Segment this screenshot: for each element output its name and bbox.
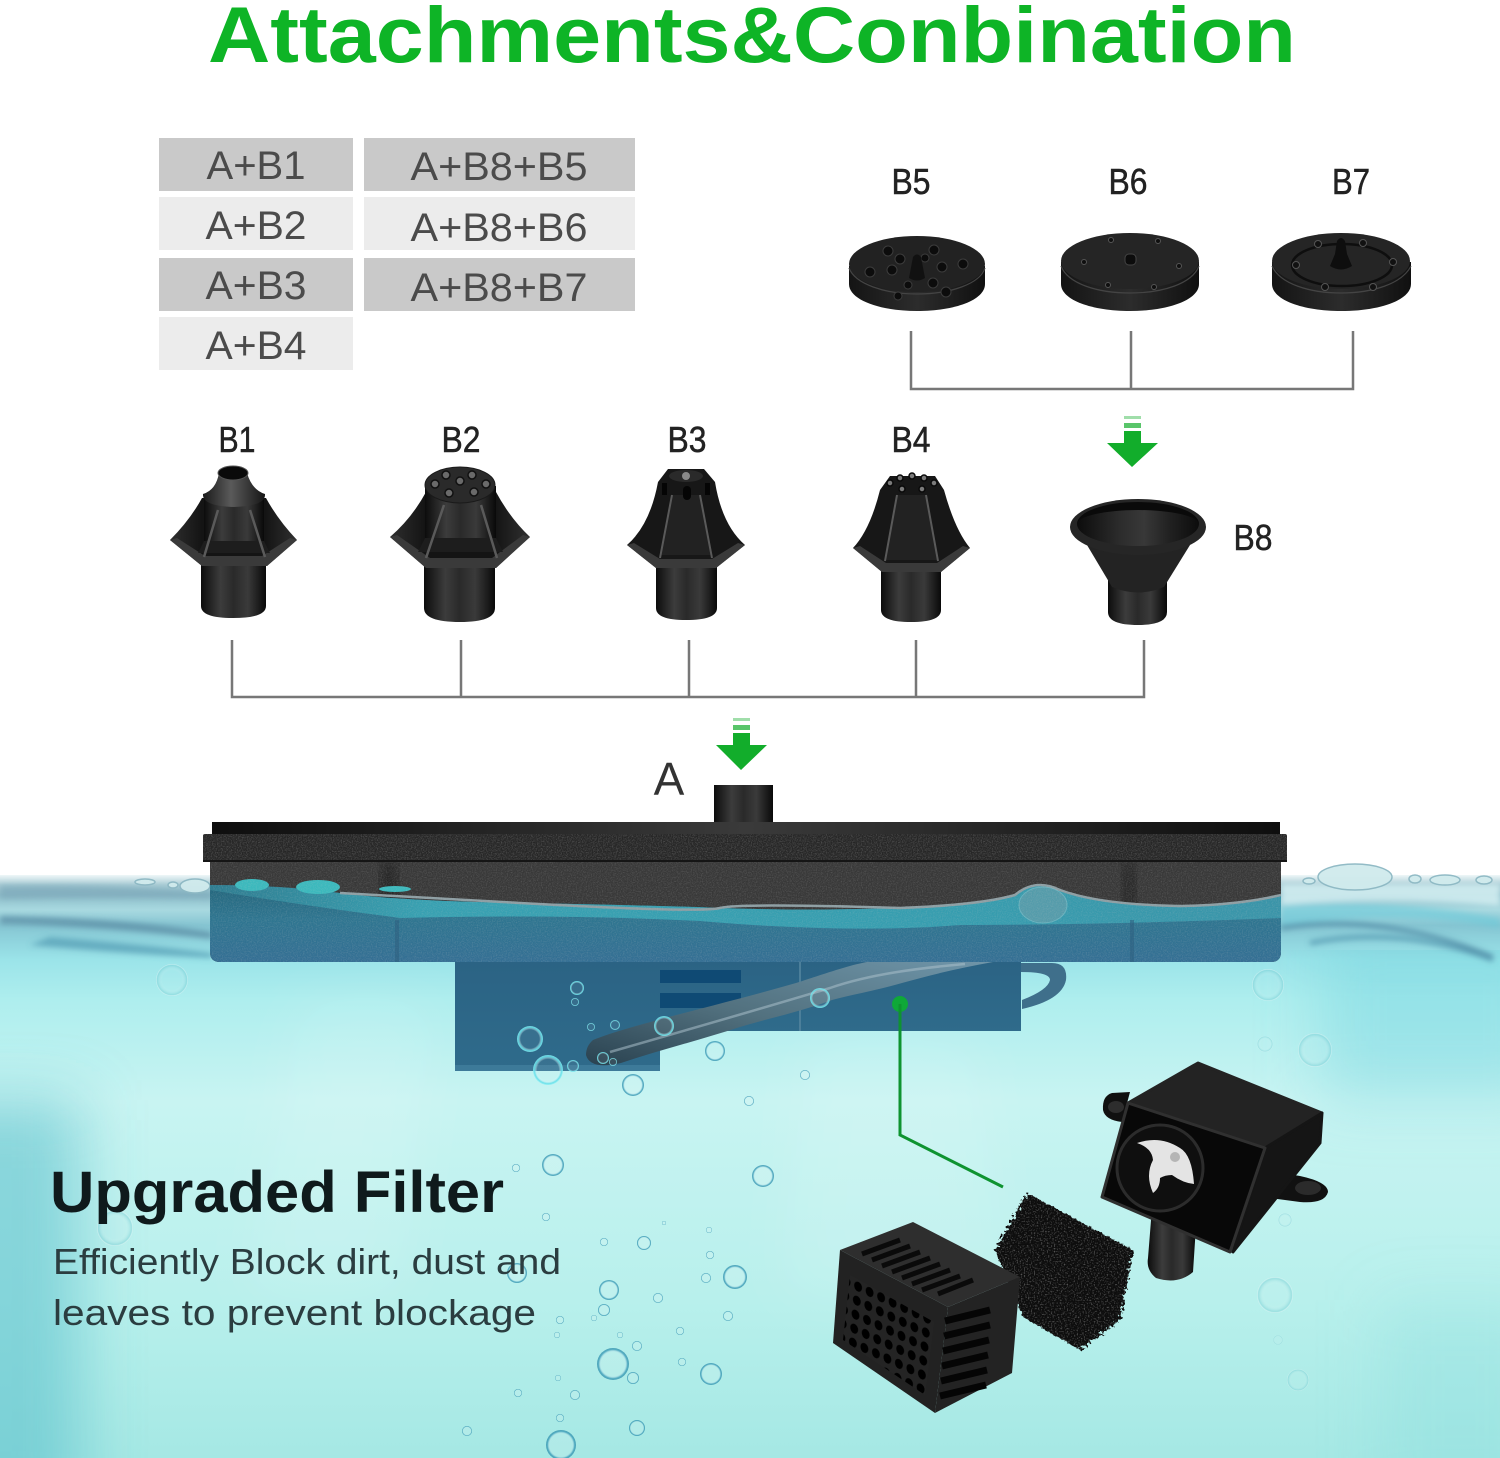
side fins	[940, 1310, 990, 1396]
background: underwater scene	[0, 864, 1500, 1458]
callout line to filter parts	[900, 1004, 1003, 1187]
heading: Upgraded Filter: Upgraded Filter	[50, 1160, 504, 1225]
label A: A	[654, 753, 685, 805]
top plate	[212, 822, 1280, 835]
pump outlet stem	[714, 785, 773, 823]
label B4: B4	[892, 419, 930, 460]
body text: leaves to prevent blockage	[53, 1292, 536, 1333]
combo A+B1: A+B1	[206, 144, 306, 188]
combo A+B2	[159, 197, 353, 250]
middle band	[203, 834, 1287, 862]
outlet	[1148, 1208, 1196, 1280]
nozzle B2	[390, 467, 530, 622]
nozzle B4	[853, 473, 970, 622]
impeller	[1137, 1140, 1194, 1193]
submerged pump housing	[455, 962, 1066, 1071]
combination table	[159, 138, 635, 370]
label B5: B5	[892, 161, 930, 202]
combo A+B1	[159, 138, 353, 191]
exploded filter: pump cover	[1102, 1063, 1328, 1280]
right mounting ear	[1255, 1170, 1328, 1202]
arrow: green to B8	[1107, 416, 1158, 467]
label B6: B6	[1108, 161, 1148, 202]
combo A+B8+B6	[364, 197, 635, 250]
combo A+B4: A+B4	[206, 324, 306, 368]
lower body with waterline	[210, 862, 1281, 962]
connector: B5 B6 B7	[911, 331, 1353, 389]
nozzle B3	[627, 469, 745, 620]
label B2: B2	[442, 419, 480, 460]
label B3: B3	[668, 419, 706, 460]
combo A+B8+B5: A+B8+B5	[410, 145, 588, 189]
combo A+B8+B7	[364, 258, 635, 311]
combo A+B3: A+B3	[206, 264, 306, 308]
exploded filter: sponge	[995, 1193, 1133, 1350]
nozzle B1	[170, 466, 297, 618]
exploded filter: cage	[833, 1222, 1020, 1413]
nozzle disc B5	[849, 236, 985, 311]
connector: B1 to B8	[232, 640, 1144, 697]
combo A+B8+B5	[364, 138, 635, 191]
floating pump body	[203, 785, 1287, 962]
top slots	[862, 1240, 973, 1294]
label B1: B1	[218, 419, 256, 460]
nozzle B8 funnel	[1070, 499, 1206, 625]
nozzle disc B6	[1061, 233, 1199, 311]
combo A+B3	[159, 258, 353, 311]
combo A+B2: A+B2	[206, 204, 306, 248]
body text: Efficiently Block dirt, dust and	[53, 1241, 561, 1282]
combo A+B4	[159, 317, 353, 370]
label B7: B7	[1332, 161, 1370, 202]
combo A+B8+B6: A+B8+B6	[410, 206, 588, 250]
callout dot	[892, 996, 908, 1012]
combo A+B8+B7: A+B8+B7	[410, 266, 588, 310]
body text	[53, 1241, 561, 1333]
nozzle disc B7	[1272, 233, 1411, 311]
label B8: B8	[1234, 517, 1272, 558]
arrow: green to A	[716, 718, 767, 770]
left mounting ear	[1103, 1092, 1130, 1122]
hose	[586, 962, 1066, 1065]
bubbles	[97, 964, 1332, 1458]
